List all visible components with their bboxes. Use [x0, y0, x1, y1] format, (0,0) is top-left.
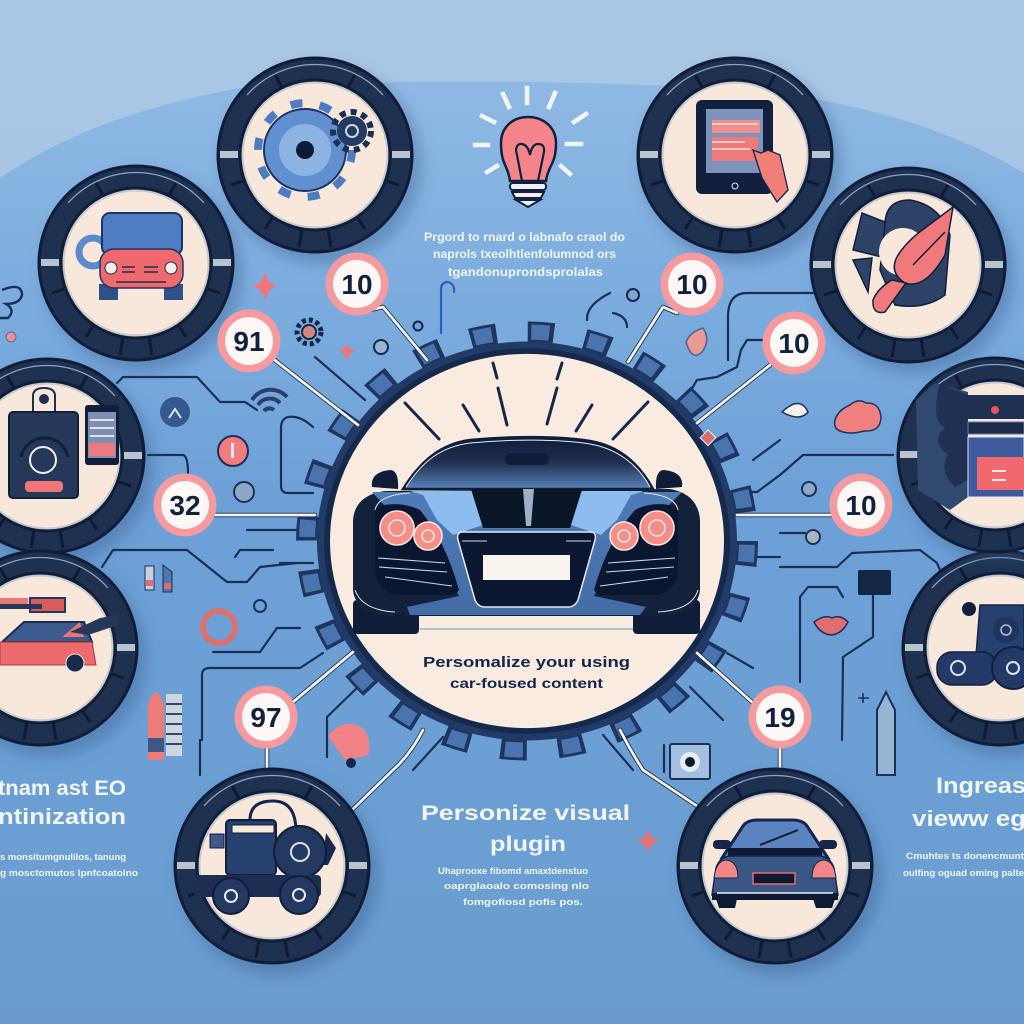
badge: 91: 91	[233, 326, 265, 357]
text block: top center: naprols txeolhtlenfolumnod ors	[433, 249, 616, 261]
icon: lips	[814, 617, 848, 635]
dark hub ring	[324, 348, 730, 734]
heading: left: ntinization	[0, 804, 126, 829]
icon: red bell	[328, 724, 369, 768]
circle: camera device	[0, 358, 154, 565]
circle: van	[0, 550, 147, 757]
heading: bottom center	[421, 802, 630, 856]
icon: grey node	[234, 482, 254, 502]
wheels	[353, 600, 419, 634]
icon: plus	[858, 693, 869, 703]
hood stripes	[471, 489, 582, 528]
ground shadow	[420, 628, 633, 630]
circle: wheeled camera	[174, 768, 379, 975]
badge: 10 right	[830, 474, 892, 536]
text block: bottom center: Uhaprooxe fibomd amaxtdenstuo	[438, 866, 589, 876]
central gear hub	[307, 332, 747, 750]
heading: right	[912, 773, 1024, 831]
icon: roller machine	[937, 602, 1024, 689]
text block: right: oulfing oguad oming palte	[903, 868, 1024, 878]
small decorative icons	[0, 272, 895, 852]
icon: leaves and screens	[916, 383, 1024, 510]
heading: bottom center: plugin	[490, 833, 566, 856]
circle: gears	[216, 56, 422, 264]
icon: rear view car	[712, 820, 838, 908]
radiating lines	[405, 363, 648, 439]
icon: question squiggle	[0, 287, 22, 318]
icon: pink gem	[686, 328, 707, 355]
icon: pink dot	[6, 332, 16, 342]
badge: 10 upper right: 10	[778, 328, 810, 359]
heading: bottom center: Personize visual	[421, 802, 630, 825]
cream face	[330, 354, 724, 728]
circle: rear car	[676, 768, 882, 975]
text block: top center: Prgord to rnard o labnafo craol do	[424, 232, 625, 244]
body outlines	[355, 493, 698, 612]
badge: 10 top right: 10	[676, 269, 708, 300]
text block: bottom center: fomgofiosd pofis pos.	[463, 897, 583, 907]
circle: tablet	[636, 56, 842, 264]
icon: tiny red square	[700, 430, 716, 445]
badge: 32: 32	[169, 490, 201, 521]
badge: 91	[218, 310, 280, 372]
icon: mini gear	[297, 320, 321, 344]
badge: 10 top right	[660, 252, 724, 316]
circle: web pages	[896, 356, 1024, 564]
badge: 19	[748, 686, 812, 748]
mirrors	[372, 470, 398, 489]
icon: sparkle left	[254, 272, 276, 300]
badge: 97	[234, 686, 298, 748]
hub caption	[423, 654, 630, 691]
icon: hollow node top	[414, 322, 422, 330]
badge: 10 top left	[326, 252, 388, 316]
icon: terminal node	[806, 530, 820, 544]
badge: 10 right: 10	[845, 490, 877, 521]
vents	[378, 558, 675, 586]
circle: compact car	[38, 164, 243, 372]
hood light panels	[410, 491, 644, 535]
icon: red cloud	[835, 401, 881, 433]
text block: top center	[424, 232, 625, 279]
central sports car	[353, 363, 700, 634]
icon: round avatar	[160, 397, 190, 427]
badge: 10 upper right	[762, 312, 826, 374]
gear teeth	[307, 332, 747, 750]
text block: bottom center: oaprglaoalo comosing nlo	[444, 881, 590, 891]
icon: gears	[258, 103, 371, 197]
heading: right: Ingreas	[936, 773, 1024, 798]
hub caption: car-foused content	[450, 675, 603, 691]
icon: lipstick	[148, 692, 182, 760]
icon: node top right	[627, 289, 639, 301]
text block: left: g mosctomutos lpnfcoatolno	[0, 868, 139, 878]
icon: hollow node	[374, 340, 388, 354]
text block: right: Cmuhtes ts donencmunt	[906, 851, 1024, 861]
heading: right: vieww eg	[912, 806, 1024, 831]
icon: pink ring	[203, 611, 235, 643]
icon: small sparkle	[339, 343, 355, 360]
icon: sparkle bottom	[637, 830, 659, 852]
right headlight	[594, 504, 678, 595]
icon: dark square	[858, 570, 891, 595]
badge: 19: 19	[764, 702, 796, 733]
text block: bottom center	[438, 866, 590, 907]
gear body	[317, 342, 737, 740]
icon: id camera and phone	[9, 388, 119, 498]
circuit lines	[102, 282, 940, 775]
badge: 10 top left: 10	[341, 269, 373, 300]
icon: red button	[218, 436, 248, 466]
text block: left	[0, 852, 139, 878]
icon: machine on wheels	[194, 801, 336, 914]
windshield and roof	[403, 437, 653, 489]
badge: 97: 97	[250, 702, 282, 733]
icon: pen	[877, 692, 895, 775]
icon: eye	[782, 404, 808, 417]
circle: rollers	[902, 550, 1024, 757]
icon: red car	[79, 213, 183, 300]
icon: mini filters	[145, 565, 172, 592]
lamps	[380, 511, 674, 550]
icon: camera	[670, 744, 710, 779]
icon: leaf and pen	[853, 200, 953, 312]
icon: wifi arcs	[252, 390, 287, 411]
text block: top center: tgandonuprondsprolalas	[448, 267, 603, 279]
circle: leaf	[810, 166, 1015, 374]
text block: right	[903, 851, 1024, 878]
badge: 32	[154, 474, 216, 536]
hub caption: Persomalize your using	[423, 654, 630, 671]
grille	[458, 532, 595, 607]
icon: red van	[0, 598, 118, 672]
icon: light bulb	[475, 88, 586, 207]
heading: left	[0, 777, 126, 829]
left headlight	[375, 504, 459, 595]
icon: mini ring	[254, 600, 266, 612]
license plate	[483, 555, 570, 580]
icon: node	[802, 482, 816, 496]
connector lines	[215, 307, 835, 810]
car body	[353, 489, 700, 616]
heading: left: tnam ast EO	[0, 777, 126, 800]
text block: left: s monsitumgnulilos, tanung	[0, 852, 126, 862]
icon: tablet with hand	[696, 100, 788, 202]
